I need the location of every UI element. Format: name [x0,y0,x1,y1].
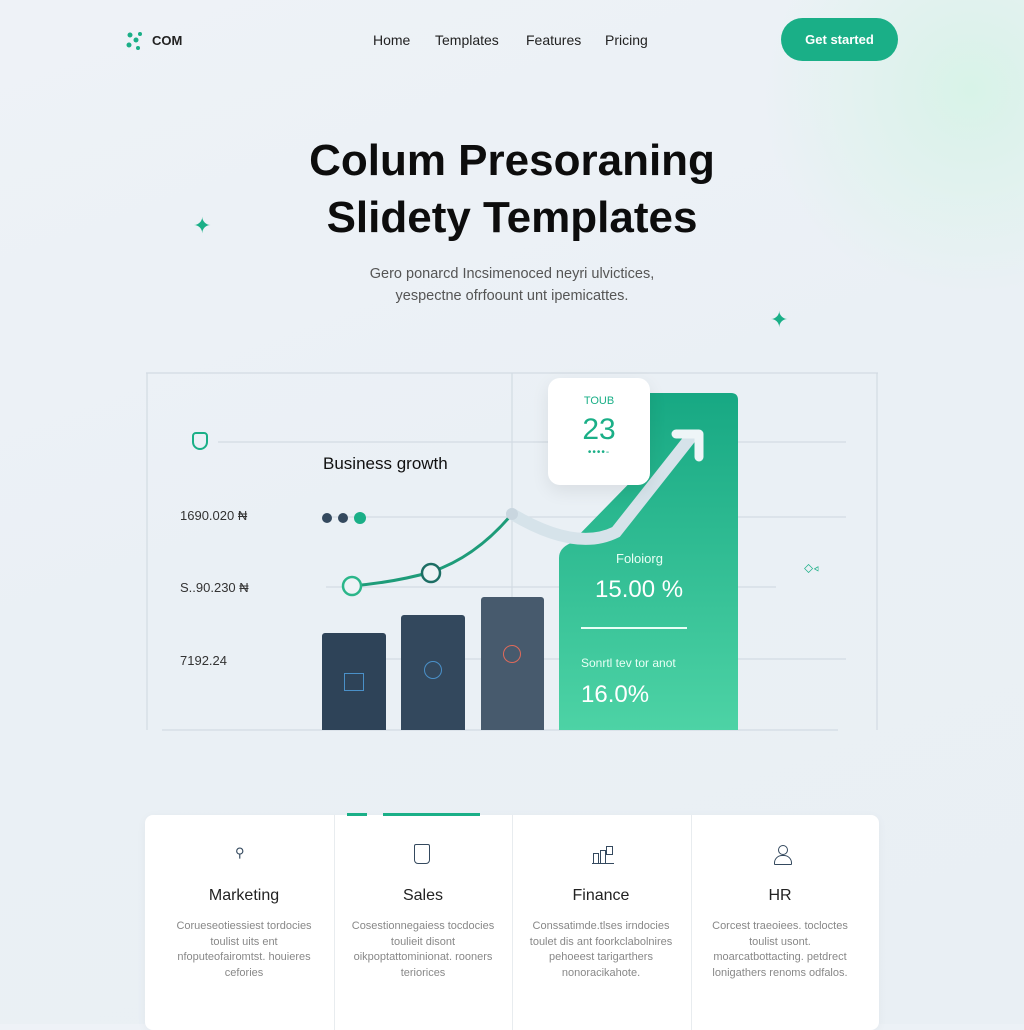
subtitle: yespectne ofrfoount unt ipemicattes. [396,288,628,304]
green panel: Sonrtl tev tor anot [581,656,676,670]
button: get started: Get started [805,32,874,47]
card: marketing: Corueseotiessiest tordocies toulist uits ent nfoputeofairomtst. houieres cefories [176,920,312,978]
icon: sparkle small: ⬦◃ [804,560,819,575]
card: sales [352,844,494,978]
line chart and arrow [342,430,704,596]
text: Templates [435,32,499,48]
icon: shield [192,432,208,450]
y-axis labels: 1690.020 ₦ [180,508,247,523]
card: marketing [176,845,312,978]
title: Slidety Templates [327,193,697,242]
title: Colum Presoraning [309,136,715,185]
button: get started [781,18,898,61]
stat card: 23 [582,413,616,446]
nav links: Home [373,32,410,48]
chart panel [146,372,878,730]
text: Pricing [605,32,648,48]
card: sales: Cosestionnegaiess tocdocies toulieit disont oikpoptattominionat. rooners teriorices [352,920,494,978]
green panel: 16.0% [581,681,649,708]
card: finance [530,846,672,978]
stat card: TOUB [584,395,614,407]
legend dots [322,512,366,524]
icon: sparkle right: ✦ [770,307,788,332]
green panel [559,393,738,730]
card: hr: HR [768,887,792,904]
card: hr [712,845,848,978]
green panel: Foloiorg [616,551,663,566]
logo: COM [152,33,182,48]
logo [126,32,182,50]
title [309,136,715,242]
chart panel: S..90.230 ₦ [180,580,249,595]
chart heading: Business growth [323,454,448,473]
subtitle [370,266,654,304]
icon: sparkle left: ✦ [193,213,211,238]
green panel: 15.00 % [595,576,683,603]
card: marketing: ⚲ [235,845,245,860]
glow background [760,0,1024,300]
card: hr: Corcest traeoiees. tocloctes toulist usont. moarcatbottacting. petdrect lonigathers renoms odfalos. [712,920,848,978]
card: finance: Conssatimde.tlses irndocies toulet dis ant foorkclabolnires pehoeest tarigarthers nonoracikahote. [530,920,672,978]
category cards [145,815,879,1030]
text: Features [526,32,581,48]
bars [322,633,386,730]
card: marketing: Marketing [209,887,279,904]
stat card: ••••- [588,447,610,458]
card: finance: Finance [573,887,629,904]
card: sales: Sales [403,887,443,904]
chart panel: 7192.24 [180,653,227,668]
stat card [548,378,650,485]
subtitle: Gero ponarcd Incsimenoced neyri ulvictices, [370,266,654,282]
